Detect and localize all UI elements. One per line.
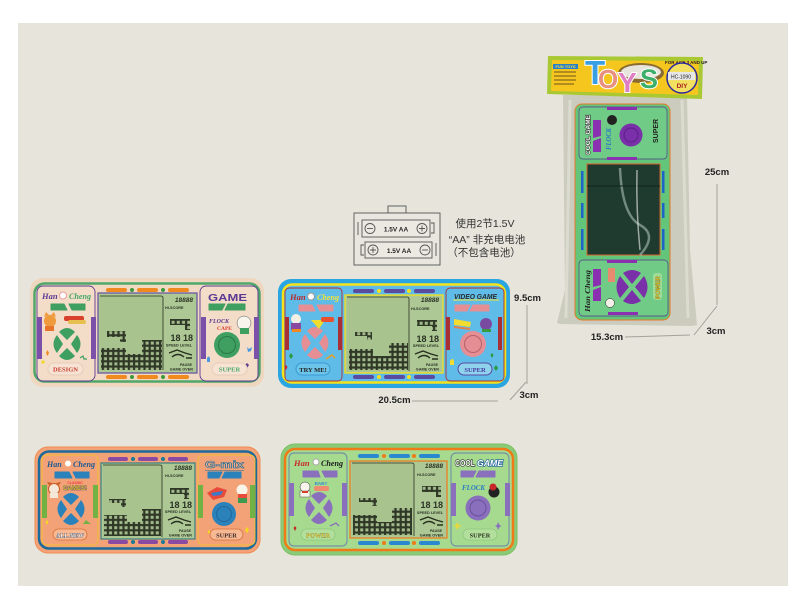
left control panel: POWER [306,532,330,540]
LCD screen [345,295,443,373]
dimension: toy height [514,293,541,384]
dark screen [587,164,660,255]
battery cell: bottom: 1.5V AA [387,248,411,255]
LCD screen: HI-SCORE [165,474,184,478]
right control panel: CAPE [217,326,232,332]
dimension: toy depth: 3cm [519,390,539,401]
plastic bag [557,95,697,326]
LCD screen: 18888 [425,463,443,470]
right control panel: SUPER [470,532,491,540]
toys logo: T [585,54,605,91]
dimension: toy width: 20.5cm [378,395,411,406]
LCD screen: PAUSE [179,529,192,533]
toy: peach DESIGN handheld [30,278,264,387]
right control panel: GAME [477,459,504,468]
toy: blue TRY ME handheld [278,279,510,388]
header card: FOR AGE 3 AND UP [665,60,707,65]
left control panel: BABY [315,481,327,486]
dimension: toy width [378,395,498,406]
indicator pills [106,288,189,379]
left control panel: Cheng [317,292,340,302]
toy: green POWER handheld [281,444,517,555]
LCD screen: SPEED LEVEL [413,344,440,348]
top panel: COOL GAME [585,114,592,155]
right control panel: G-mix [205,460,245,471]
mascot: cat [44,312,56,331]
header card: FUN TOYS [555,64,576,69]
battery note: “AA” 非充电电池 [449,233,526,246]
LCD screen: 18 18 [169,500,192,510]
toys logo: O [598,64,618,94]
LCD screen: SPEED LEVEL [165,510,192,514]
right control panel: SUPER [216,532,237,540]
right control panel: COOL [455,459,475,468]
left control panel: Han [46,460,62,469]
left control panel: Cheng [69,291,92,301]
left control panel: CLASSIC [67,481,83,485]
right control panel [446,288,504,381]
LCD screen: GAME OVER [169,534,192,538]
LCD screen: 18888 [174,465,192,472]
right control panel: SUPER [219,366,240,374]
LCD screen: GAME OVER [420,534,443,538]
bottom panel [579,260,668,316]
age badge [667,63,697,93]
dimension: package depth: 3cm [706,326,726,337]
dimension: package depth [694,306,726,337]
dimension: package width: 15.3cm [591,332,623,343]
mascot: puppy [300,482,310,497]
side strips [581,171,664,250]
left control panel: Han [41,291,58,301]
mascot: chef [291,314,301,332]
LCD screen [98,293,197,373]
left control panel: DESIGN [53,366,78,374]
LCD screen: HI-SCORE [165,306,184,310]
indicator pills [353,289,435,379]
left control panel [42,455,98,545]
LCD screen: SPEED LEVEL [417,511,444,515]
bottom panel: Han Cheng [584,269,592,313]
top panel [579,107,667,160]
LCD screen: HI-SCORE [411,307,430,311]
right control panel [451,453,510,546]
LCD screen: 18 18 [170,333,193,343]
dimension: package width [591,332,690,343]
LCD screen: HI-SCORE [417,473,436,477]
age badge: HC-1090 [671,74,691,80]
mascot: dog [47,482,61,498]
left control panel: GAMES! [63,486,87,492]
toys logo [585,54,658,98]
LCD screen: 18888 [175,297,193,304]
bottom panel: POWER [656,276,662,299]
right control panel: VIDEO GAME [454,294,497,301]
battery note [447,217,526,259]
LCD screen: SPEED LEVEL [166,344,193,348]
header card [547,54,707,99]
LCD screen: PAUSE [430,529,443,533]
left control panel: Cheng [73,460,95,469]
battery note: 使用2节1.5V [456,217,514,230]
LCD screen: 18888 [421,297,439,304]
left control panel [284,288,342,381]
LCD screen: PAUSE [180,363,193,367]
battery diagram [354,206,440,265]
dimension: toy depth [510,382,539,401]
left control panel [37,286,96,381]
right control panel [198,455,255,545]
left control panel [289,453,347,546]
dimension: package height [705,167,729,305]
dimension: toy height: 9.5cm [514,293,541,304]
dimension: package height: 25cm [705,167,729,178]
right control panel: FLOCK [462,484,486,492]
left control panel: Han [289,292,306,302]
LCD screen: 18 18 [420,500,443,510]
right control panel [200,286,259,381]
top panel: SUPER [653,119,660,143]
right control panel: FLOCK [209,319,230,325]
LCD screen: GAME OVER [170,368,193,372]
LCD screen: PAUSE [426,363,439,367]
packaged toy [547,54,707,326]
battery note: （不包含电池） [447,246,521,259]
toy: orange ALL NEW handheld [35,447,260,553]
toy body in package [575,104,670,320]
battery cell: top: 1.5V AA [384,226,408,234]
LCD screen [350,461,447,538]
left control panel: ALL NEW [56,534,84,540]
indicator pills [358,454,440,545]
right control panel: SUPER [464,367,486,374]
toys logo: Y [618,67,637,98]
LCD screen: GAME OVER [416,368,439,372]
right control panel: GAME [208,293,247,304]
indicator pills [108,457,188,544]
toys logo: S [640,64,658,94]
left control panel: Cheng [321,458,344,468]
left control panel: Han [293,458,310,468]
top panel: FLOCK [605,127,613,150]
left control panel: TRY ME! [299,367,327,374]
age badge: DIY [677,83,688,90]
LCD screen [101,463,195,539]
LCD screen: 18 18 [416,334,439,344]
